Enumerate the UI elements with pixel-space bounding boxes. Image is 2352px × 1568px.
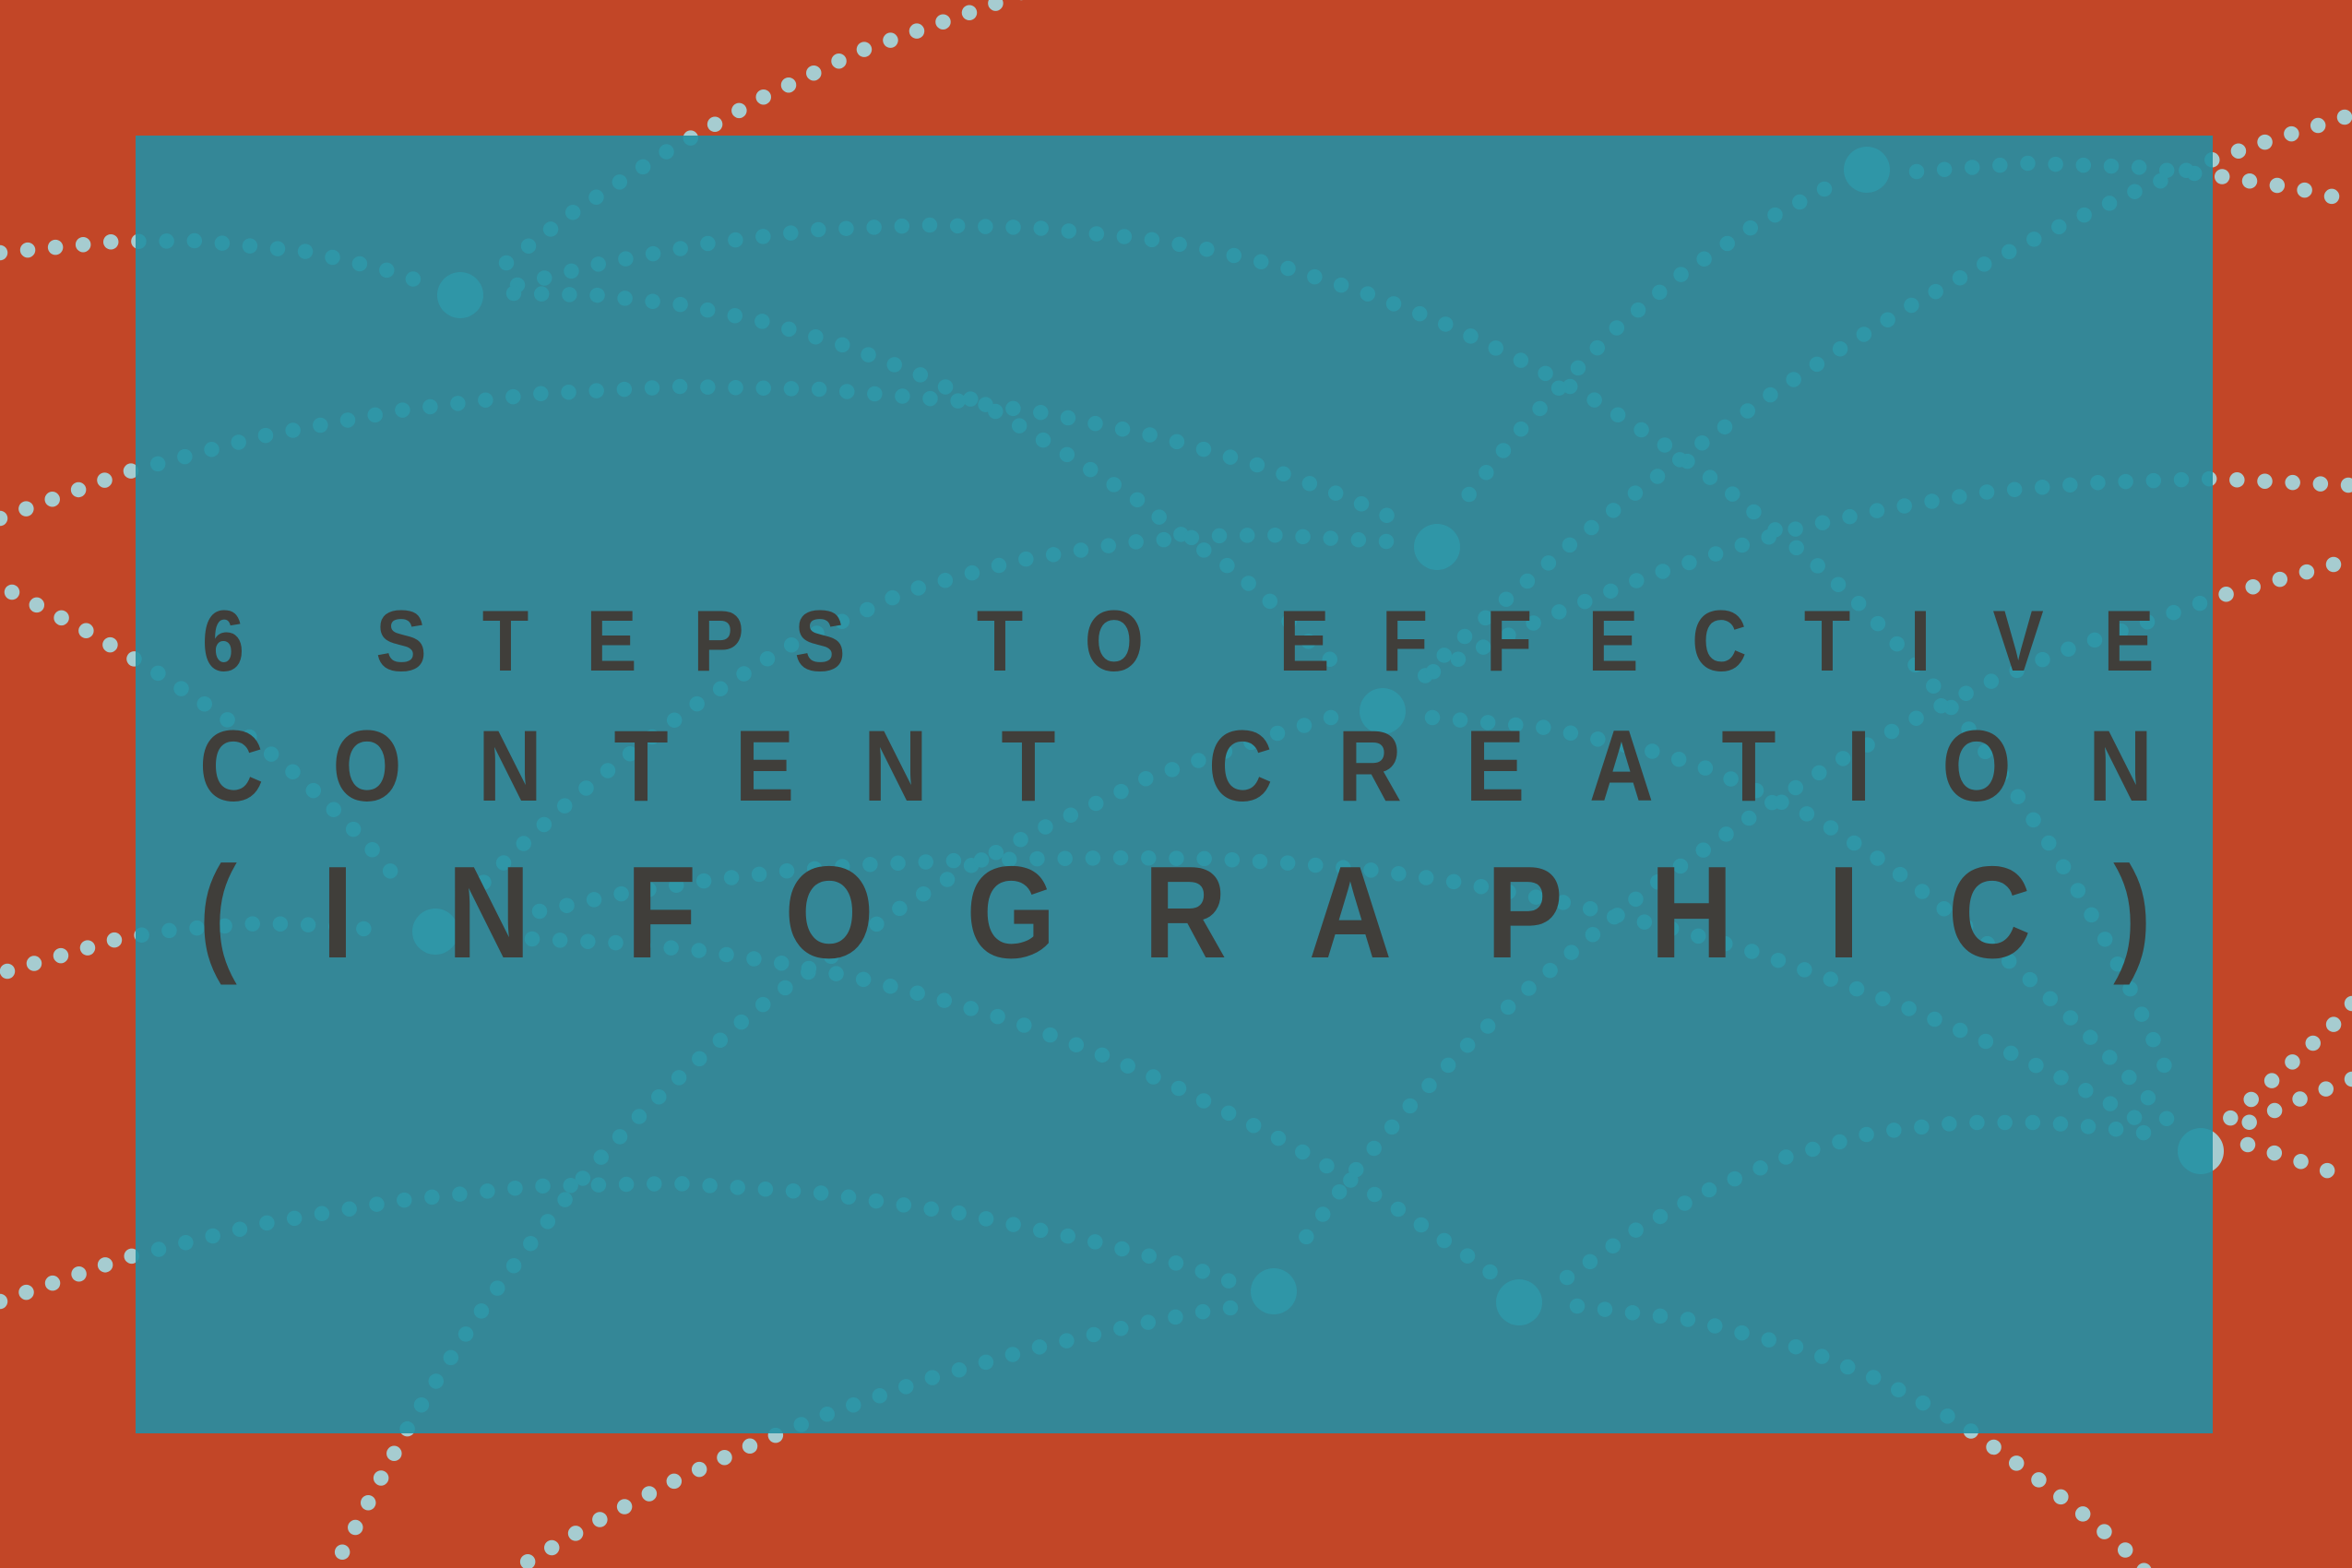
panel: teal background [136,136,2213,1433]
dotted network inside panel [136,136,2213,1433]
title: 6 STEPS TO EFFECTIVE [202,592,2155,689]
title: CONTENT CREATION [199,708,2153,822]
title [198,592,2155,986]
title: (INFOGRAPHIC) [198,840,2152,986]
